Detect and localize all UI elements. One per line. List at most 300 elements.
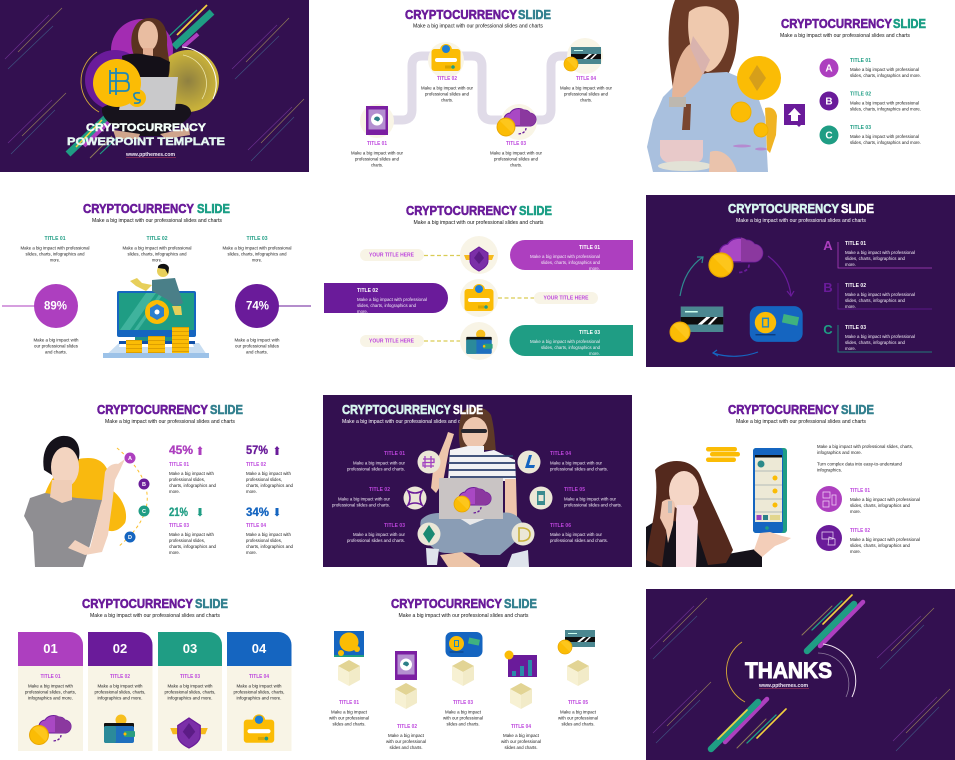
row 2 icon (460, 279, 498, 317)
column 1 text: more. (50, 258, 60, 262)
stat 21%: Make a big impact with (169, 532, 214, 537)
card 02: infographics and more. (98, 696, 142, 700)
step 1 text: Make a big impact with our (351, 150, 403, 156)
heading: Make a big impact with our professional slides and charts (414, 220, 544, 226)
heading: CRYPTOCURRENCY (405, 8, 518, 22)
step 1 text: professional slides and (355, 156, 399, 162)
icon: bank card (564, 38, 603, 74)
bars bottom (711, 699, 786, 749)
right text blocks: TITLE 06 (550, 523, 571, 529)
item 2: slides and charts. (390, 745, 422, 750)
item 2: more. (850, 549, 861, 554)
stat 34%: 34% (246, 505, 269, 519)
step 4 text: TITLE 04 (576, 76, 596, 82)
card 01 (18, 632, 83, 751)
item B (820, 92, 921, 112)
item 4: with our professional (501, 739, 541, 744)
stat 45%: professional slides, (169, 477, 205, 482)
panel: slide 11 cubes (329, 597, 598, 750)
row 3 bar (510, 325, 633, 356)
stat 74% (234, 284, 311, 354)
item A: TITLE 01 (850, 58, 871, 64)
row 1 bar: TITLE 01 (579, 245, 600, 251)
left text blocks: professional slides and charts. (347, 538, 405, 543)
panel: slide 10 cards (18, 597, 292, 751)
stat 34%: Make a big impact with (246, 532, 291, 537)
illustration: person with monitor and coins (103, 264, 209, 358)
stat 34%: professional slides, (246, 538, 282, 543)
heading: SLIDE (518, 8, 551, 22)
arrow: green (680, 257, 703, 296)
item 1 (329, 631, 369, 726)
item 4 (501, 650, 541, 750)
item C: TITLE 03 (845, 325, 866, 331)
heading: CRYPTOCURRENCY (406, 204, 518, 218)
step 2 text: professional slides and (425, 92, 469, 96)
heading: Make a big impact with our professional slides and charts (413, 24, 543, 30)
left text blocks: professional slides and charts. (347, 466, 405, 472)
arcs (726, 642, 856, 702)
step 4 text: professional slides and (564, 92, 608, 96)
heading: SLIDE (841, 202, 874, 216)
item 1: Make a big impact with professional (850, 497, 920, 502)
icon: pin card (428, 42, 464, 78)
card 01: TITLE 01 (40, 674, 60, 680)
panel: slide 2 path timeline (351, 8, 612, 168)
item 3: slides and charts. (446, 722, 480, 726)
item 2 (816, 525, 920, 554)
step 3 text: professional slides and (494, 156, 538, 162)
card 04: TITLE 04 (249, 674, 269, 680)
item C: slides, charts, infographics and more. (850, 140, 921, 145)
item C: C (823, 322, 833, 337)
stat 45%: more. (169, 489, 180, 494)
item C: TITLE 03 (850, 125, 871, 131)
arcs (81, 47, 216, 112)
intro text: infographics. (817, 468, 842, 472)
item A: TITLE 01 (845, 241, 866, 247)
item C: C (825, 130, 833, 142)
item 2 (386, 651, 426, 750)
column 3 text (222, 236, 292, 262)
item 1: Make a big impact (331, 710, 368, 714)
arrow: purple (768, 256, 794, 296)
icon: cloud on laptop (454, 487, 491, 513)
item 5 (558, 630, 598, 726)
icon: bank card (670, 306, 723, 342)
heading: Make a big impact with our professional slides and charts (105, 419, 235, 425)
card 03 (158, 632, 222, 751)
item C (823, 322, 932, 352)
heading (406, 204, 552, 226)
stat 34%: charts, infographics and (246, 544, 293, 549)
card 04: infographics and more. (236, 696, 282, 700)
intro text: Turn complex data into easy-to-understand (817, 462, 902, 466)
card 02: 02 (113, 641, 127, 656)
woman photo (646, 461, 791, 567)
stat 74%: our professional slides (235, 344, 280, 348)
item 3: with our professional (443, 716, 483, 720)
heading: Make a big impact with our professional slides and charts (736, 218, 866, 224)
heading (780, 17, 926, 39)
intro text: Make a big impact with professional slides, charts, (817, 444, 913, 449)
heading: SLIDE (893, 17, 926, 31)
winding road (393, 56, 575, 120)
heading: CRYPTOCURRENCY (342, 403, 452, 417)
row 3 label: YOUR TITLE HERE (369, 338, 414, 344)
item 3 (443, 632, 483, 726)
icon: cloud and coin (709, 238, 763, 277)
step 3 text: charts. (510, 162, 522, 168)
card 01: professional slides, charts, (25, 690, 76, 694)
stat 21%: professional slides, (169, 538, 205, 543)
icon: up arrow badge (784, 104, 805, 127)
row 1 label: YOUR TITLE HERE (369, 252, 414, 258)
left text blocks: TITLE 03 (384, 523, 405, 529)
step 2 text: TITLE 02 (437, 76, 457, 82)
heading: Make a big impact with our professional slides and charts (90, 613, 220, 619)
left text blocks: Make a big impact with our (338, 496, 390, 502)
left text blocks: Make a big impact with our (353, 532, 405, 537)
step 1 text (351, 141, 403, 168)
website link: www.ppthemes.com (758, 683, 808, 689)
row 2 bar: more. (357, 309, 368, 314)
row 3 bar: Make a big impact with professional (530, 339, 600, 344)
woman photo (647, 0, 777, 172)
row 2 bar (324, 283, 448, 314)
stat 57%: charts, infographics and (246, 483, 293, 488)
panel: slide 8 woman with laptop (323, 395, 632, 567)
panel: slide 6 cycle (646, 195, 955, 367)
right text blocks: professional slides and charts. (564, 502, 622, 508)
woman photo (24, 436, 125, 567)
card 03: 03 (183, 641, 197, 656)
item C: Make a big impact with professional (850, 134, 919, 139)
item 2: slides, charts, infographics and (850, 543, 910, 548)
icon: blue wallet box (750, 306, 803, 342)
column 3 text: TITLE 03 (246, 236, 268, 242)
step 4 text: Make a big impact with our (560, 86, 612, 90)
yellow blob (45, 458, 126, 531)
step 2 text: charts. (441, 98, 453, 102)
step 2 text (421, 76, 473, 102)
item B: slides, charts, infographics and more. (850, 106, 921, 112)
stat 57%: 57% (246, 443, 268, 457)
stat 57% (246, 443, 293, 494)
card 02 (88, 632, 152, 751)
panel: slide 5 rows (324, 204, 633, 360)
heading: SLIDE (195, 597, 228, 611)
item 2: TITLE 02 (850, 528, 870, 534)
heading: CRYPTOCURRENCY (97, 403, 209, 417)
column 3 text: Make a big impact with professional (222, 246, 292, 250)
right text blocks: Make a big impact with our (550, 532, 602, 537)
stat 45%: Make a big impact with (169, 471, 214, 476)
marker D (124, 532, 136, 542)
item 4: Make a big impact (503, 733, 540, 738)
cover title: POWERPOINT TEMPLATE (67, 136, 225, 148)
heading (728, 403, 874, 425)
panel: slide 9 phone (646, 403, 920, 567)
panel: slide 7 woman pointing (24, 403, 293, 567)
column 1 text: slides, charts, infographics and (26, 252, 85, 256)
step 1 text: charts. (371, 162, 383, 168)
column 3 text: more. (252, 258, 262, 262)
stat 34%: more. (246, 550, 257, 555)
panel: slide 12 thanks (646, 589, 955, 760)
item B: B (825, 96, 833, 108)
phone (753, 448, 787, 533)
stat 21%: more. (169, 550, 180, 555)
heading: CRYPTOCURRENCY (728, 202, 840, 216)
icon: ethereum coins (731, 56, 781, 137)
card 02: professional slides, charts, (94, 690, 146, 694)
stat 45% (169, 443, 216, 494)
icon: small coin (128, 89, 146, 107)
item A: Make a big impact with professional (850, 67, 919, 72)
icon: tablet (360, 104, 394, 138)
card 03: professional slides, charts, (164, 690, 216, 694)
stat 89%: Make a big impact with (34, 338, 79, 342)
heading (728, 202, 874, 224)
website link: www.ppthemes.com (125, 152, 175, 158)
panel: slide 3 woman on phone (647, 0, 926, 172)
card 04: professional slides, charts, (234, 690, 284, 694)
item B: Make a big impact with professional (850, 100, 919, 106)
item B: Make a big impact with professional (845, 292, 915, 297)
card 04: 04 (252, 641, 267, 656)
item B: TITLE 02 (850, 92, 871, 98)
item 5: slides and charts. (562, 722, 594, 726)
card 01: infographics and more. (28, 696, 73, 700)
icon: cloud and coin (497, 104, 537, 140)
stat 57%: TITLE 02 (246, 462, 266, 468)
card 03: Make a big impact with (168, 684, 213, 688)
marker B (138, 478, 150, 490)
marker B: B (142, 482, 146, 488)
heading: CRYPTOCURRENCY (83, 202, 195, 216)
item A: slides, charts, infographics and (845, 256, 905, 261)
heading: SLIDE (504, 597, 537, 611)
step 2 text: Make a big impact with our (421, 86, 473, 90)
item 1: TITLE 01 (850, 488, 870, 494)
marker C (138, 506, 150, 516)
heading: Make a big impact with our professional slides and charts (736, 419, 866, 425)
stat 89% (2, 284, 79, 354)
arrow: blue (713, 350, 758, 356)
left text blocks (332, 451, 405, 543)
item 3: Make a big impact (445, 710, 482, 714)
heading (97, 403, 243, 425)
column 2 text: slides, charts, infographics and (128, 252, 187, 256)
row 2 label (498, 292, 598, 304)
row 3 label (360, 335, 460, 347)
item 2: Make a big impact with professional (850, 537, 920, 542)
left text blocks: professional slides and charts. (332, 502, 390, 508)
item A: A (823, 238, 833, 253)
row 2 bar: TITLE 02 (357, 288, 378, 294)
step 3 text: Make a big impact with our (490, 150, 542, 156)
step 4 text: charts. (580, 98, 592, 102)
heading: Make a big impact with our professional slides and charts (398, 613, 529, 619)
item B (823, 280, 932, 309)
item C (820, 125, 921, 145)
heading (83, 202, 230, 224)
item C: slides, charts, infographics and (845, 340, 905, 345)
heading: CRYPTOCURRENCY (391, 597, 503, 611)
right text blocks: professional slides and charts. (550, 466, 608, 472)
item 2: TITLE 02 (397, 724, 417, 730)
card 04: Make a big impact with (236, 684, 282, 688)
background circles (85, 19, 219, 112)
column 1 text: TITLE 01 (44, 236, 66, 242)
marker C: C (142, 509, 146, 515)
coin bars (706, 447, 740, 462)
heading: SLIDE (841, 403, 874, 417)
item C: Make a big impact with professional (845, 334, 915, 339)
column 2 text: Make a big impact with professional (122, 246, 192, 250)
item 5: TITLE 05 (568, 700, 588, 706)
stat 34% (246, 505, 293, 555)
item 1: with our professional (329, 716, 369, 720)
row 1 label (360, 249, 460, 261)
item A: more. (845, 262, 856, 267)
marker A (124, 452, 136, 464)
item 1: more. (850, 509, 861, 514)
left text blocks: TITLE 02 (369, 487, 390, 493)
thanks title: THANKS (745, 658, 832, 683)
step 3 text (490, 141, 542, 168)
coin badges (404, 450, 552, 546)
stat 57%: more. (246, 489, 257, 494)
right text blocks: professional slides and charts. (550, 538, 608, 543)
heading: SLIDE (519, 204, 552, 218)
panel: slide 4 percentages (2, 202, 311, 358)
item B: more. (845, 304, 856, 309)
item 3: TITLE 03 (453, 700, 473, 706)
right text blocks: TITLE 05 (564, 487, 585, 493)
item B: B (823, 280, 833, 295)
panel: slide 1 cover (0, 0, 309, 172)
step 1 text: TITLE 01 (367, 141, 387, 147)
row 1 bar: Make a big impact with professional (530, 254, 600, 259)
woman with laptop (102, 18, 191, 139)
item 5: Make a big impact (560, 710, 597, 714)
heading: Make a big impact with our professional slides and charts (92, 218, 222, 224)
cover title (67, 122, 225, 148)
card 01: Make a big impact with (28, 684, 73, 688)
item 4: slides and charts. (504, 745, 538, 750)
column 2 text (122, 236, 192, 262)
stat 74%: 74% (246, 298, 269, 312)
heading: SLIDE (210, 403, 243, 417)
left text blocks: Make a big impact with our (353, 460, 405, 466)
decorative bars top (167, 5, 212, 47)
row 1 bar: slides, charts, infographics and (541, 260, 600, 265)
item 1 (816, 486, 920, 514)
heading: SLIDE (197, 202, 230, 216)
heading: CRYPTOCURRENCY (728, 403, 840, 417)
heading (391, 597, 537, 619)
item 1: TITLE 01 (339, 700, 359, 706)
stat 21%: 21% (169, 505, 188, 519)
row 3 bar: more. (589, 351, 600, 356)
row 1 bar (510, 240, 633, 271)
stat 74%: Make a big impact with (234, 338, 280, 342)
heading (82, 597, 228, 619)
stat 57%: Make a big impact with (246, 471, 291, 476)
stat 45%: TITLE 01 (169, 462, 189, 468)
left text blocks: TITLE 01 (384, 451, 405, 457)
stat 45%: 45% (169, 443, 193, 457)
bars top (802, 595, 863, 651)
item A: A (825, 64, 833, 74)
row 3 bar: TITLE 03 (579, 330, 600, 336)
column 2 text: more. (152, 258, 162, 262)
icon: bitcoin coin (93, 59, 141, 107)
item 1: slides and charts. (332, 722, 366, 726)
column 3 text: slides, charts, infographics and (228, 252, 287, 256)
heading: Make a big impact with our professional slides and charts (780, 33, 910, 39)
item A: Make a big impact with professional (845, 250, 915, 255)
item B: TITLE 02 (845, 283, 866, 289)
item A (823, 238, 932, 268)
stat 89%: and charts. (45, 350, 67, 354)
column 1 text: Make a big impact with professional (20, 246, 90, 250)
card 02: TITLE 02 (110, 674, 130, 680)
marker A: A (128, 456, 132, 462)
right text blocks: TITLE 04 (550, 451, 571, 457)
row 1 icon (460, 236, 498, 274)
subheading: Make a big impact with our professional slides and charts (342, 419, 472, 425)
row 1 bar: more. (589, 266, 600, 271)
heading (405, 8, 551, 30)
stat 21%: TITLE 03 (169, 523, 189, 529)
item B: slides, charts, infographics and (845, 298, 905, 303)
step 3 text: TITLE 03 (506, 141, 526, 147)
intro text (817, 444, 913, 472)
item 2: with our professional (386, 739, 426, 744)
stat 21%: charts, infographics and (169, 544, 216, 549)
marker D: D (128, 535, 132, 541)
item C: more. (845, 346, 856, 351)
heading: CRYPTOCURRENCY (82, 597, 194, 611)
right text blocks: Make a big impact with our (550, 460, 602, 466)
right text blocks: Make a big impact with our (564, 496, 616, 502)
stat 89%: 89% (44, 298, 67, 312)
card 03: TITLE 03 (180, 674, 200, 680)
dashed arc (117, 448, 147, 547)
item A: slides, charts, infographics and more. (850, 73, 921, 78)
woman photo (420, 407, 529, 567)
item 4: TITLE 04 (511, 724, 531, 730)
card 02: Make a big impact with (98, 684, 143, 688)
item A (820, 58, 921, 78)
row 3 bar: slides, charts, infographics and (541, 345, 600, 350)
column 1 text (20, 236, 90, 262)
cover title: CRYPTOCURRENCY (86, 122, 207, 134)
row 2 label: YOUR TITLE HERE (544, 296, 589, 302)
item 1: slides, charts, infographics and (850, 503, 910, 508)
card 01: 01 (43, 641, 58, 656)
stat 57%: professional slides, (246, 477, 282, 482)
card 03: infographics and more. (168, 696, 212, 700)
stat 34%: TITLE 04 (246, 523, 266, 529)
row 3 icon (460, 322, 498, 360)
heading: CRYPTOCURRENCY (781, 17, 893, 31)
heading: SLIDE (453, 403, 483, 417)
row 2 bar: slides, charts, infographics and (357, 303, 416, 308)
